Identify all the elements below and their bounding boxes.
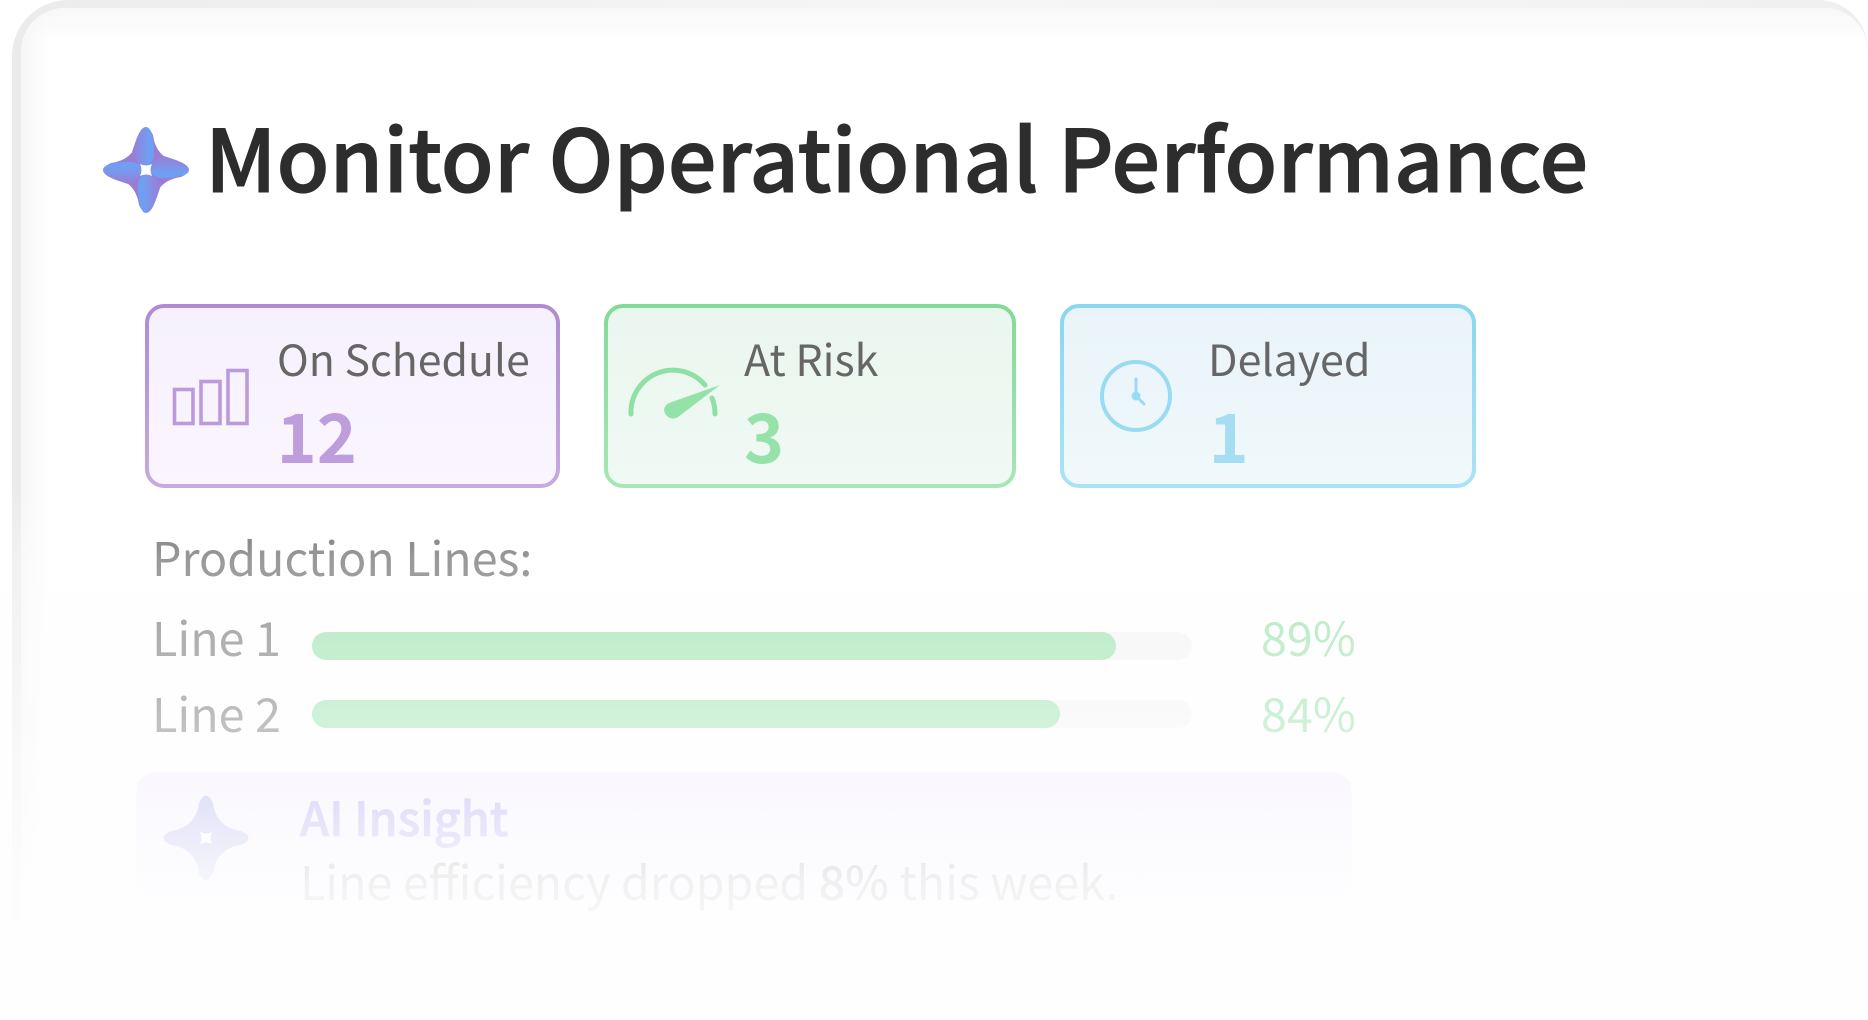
icon: clock	[1102, 362, 1170, 430]
panel: on schedule	[147, 306, 558, 486]
title: Monitor Operational Performance	[205, 92, 1588, 217]
panel: delayed	[1062, 306, 1474, 486]
panel: AI insight	[136, 772, 1352, 914]
row: line 1	[152, 603, 1356, 670]
bar fill: line 2	[312, 700, 1060, 728]
label: delayed: Delayed	[1208, 327, 1371, 389]
icon: AI sparkle	[164, 796, 248, 880]
row: line 2	[152, 679, 1356, 746]
panel frame	[12, 0, 1868, 727]
bar fill: line 1	[312, 632, 1116, 660]
text: insight message: Line efficiency dropped 8% this week.	[300, 847, 1118, 914]
label: line 1: Line 1	[152, 603, 281, 670]
value: 1: 1	[1209, 384, 1249, 483]
label: at risk: At Risk	[744, 327, 879, 389]
label: line 2: Line 2	[152, 679, 281, 746]
value: 84%: 84%	[1261, 679, 1356, 746]
label: on schedule: On Schedule	[277, 327, 530, 389]
heading: AI insight: AI Insight	[300, 783, 508, 850]
value: 3: 3	[744, 384, 784, 483]
icon: bar chart	[174, 370, 247, 424]
bar track: line 1	[312, 632, 1192, 660]
heading: production lines: Production Lines:	[152, 523, 532, 590]
value: 89%: 89%	[1261, 603, 1356, 670]
icon: speedometer gauge	[631, 370, 720, 419]
bar track: line 2	[312, 700, 1192, 728]
icon: sparkle star	[103, 127, 189, 213]
panel: at risk	[606, 306, 1014, 486]
value: 12: 12	[277, 384, 357, 483]
